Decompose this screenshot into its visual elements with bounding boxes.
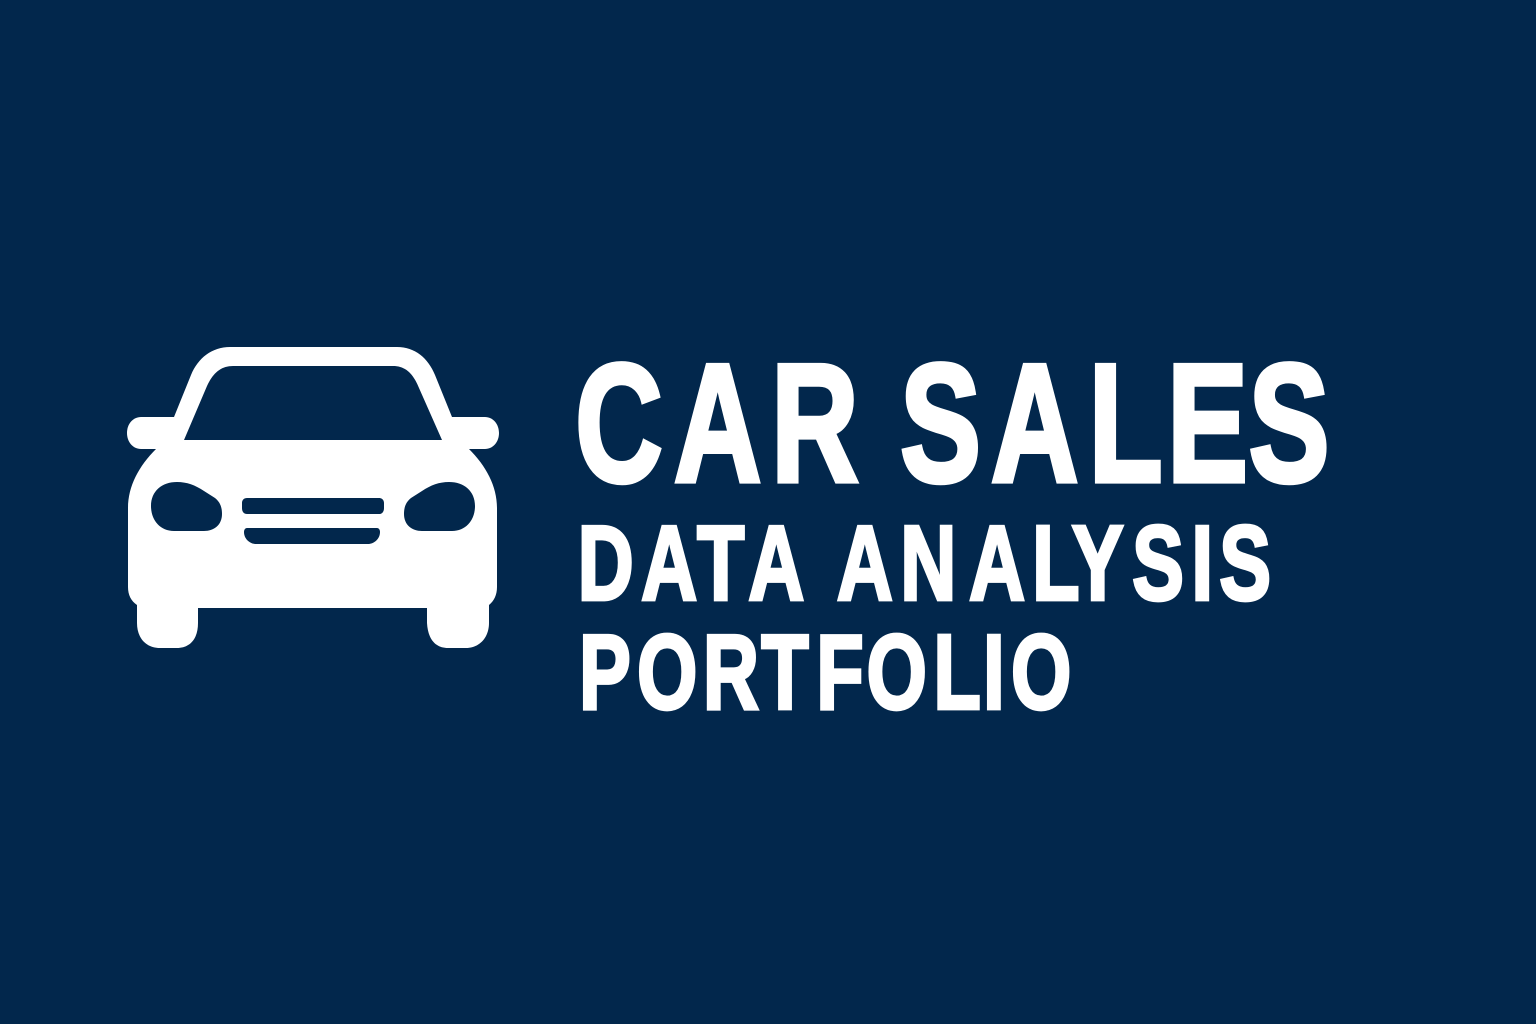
title: car sales: CAR SALES [575, 330, 1329, 518]
icon: car front view [127, 347, 499, 648]
subtitle: data analysis: DATA ANALYSIS [578, 504, 1271, 622]
subtitle: portfolio: PORTFOLIO [579, 613, 1071, 731]
